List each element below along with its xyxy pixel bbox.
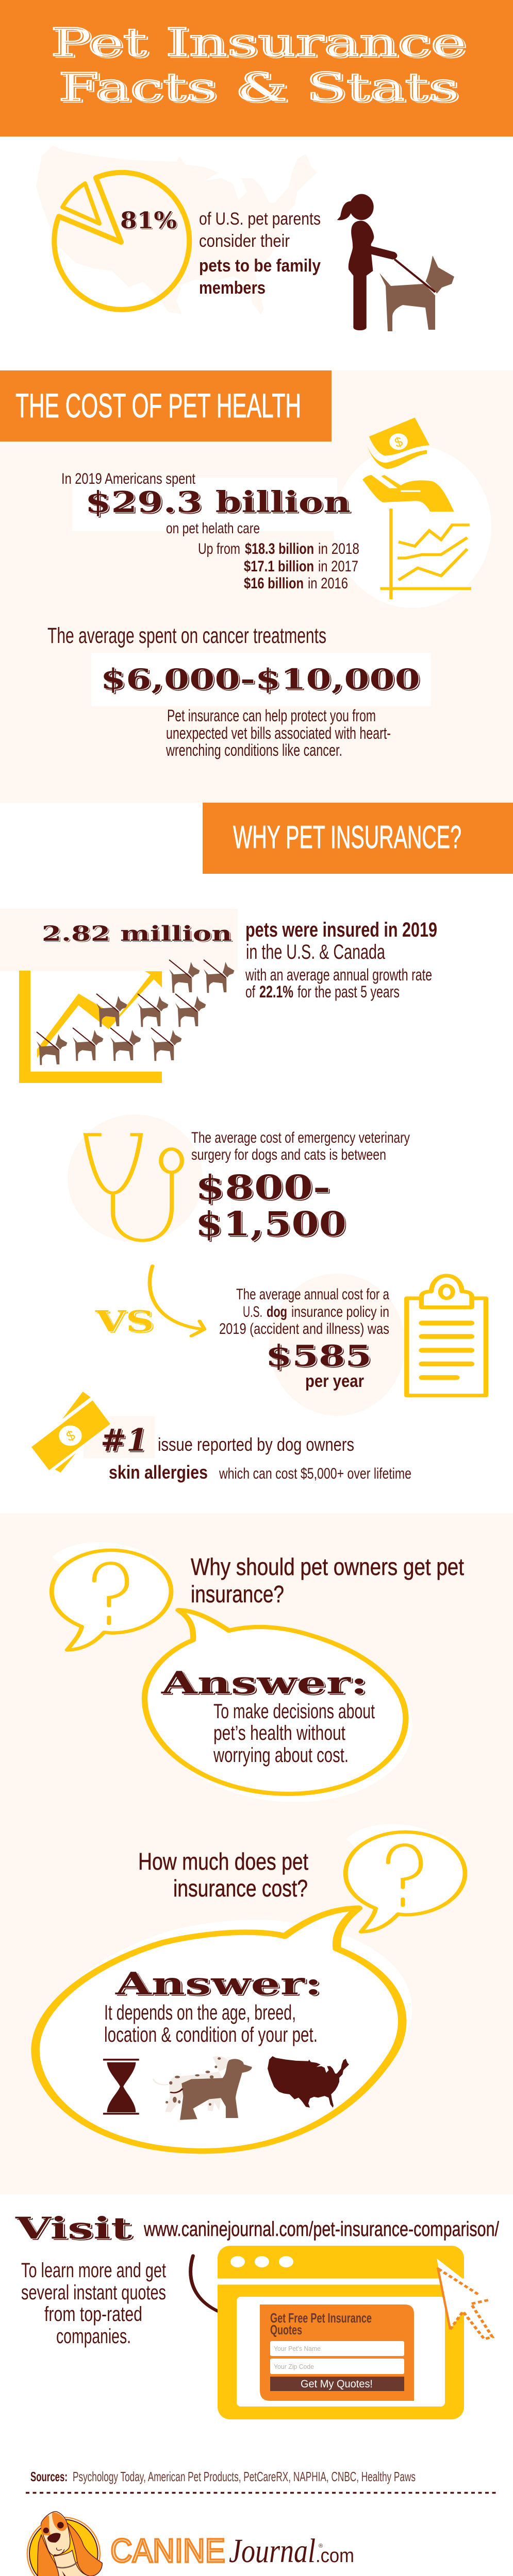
backdrop box: number one bbox=[84, 1416, 155, 1458]
stat: cancer treatment cost: The average spent on cancer treatments bbox=[47, 623, 326, 648]
answer two text: location & condition of your pet. bbox=[104, 2023, 318, 2046]
text: pets insured: of bbox=[245, 982, 255, 1001]
text: prior year spending: in 2018 bbox=[318, 540, 359, 557]
text: pets insured: pets were insured in 2019 bbox=[245, 919, 437, 941]
icon: question bubble two bbox=[345, 1824, 465, 1932]
quote form: Get Free Pet Insurance bbox=[270, 2310, 372, 2326]
icon: cursor bbox=[437, 2259, 492, 2339]
wordmark: .com bbox=[316, 2545, 354, 2567]
quote form: Your Zip Code bbox=[274, 2363, 314, 2370]
stat: spending in 2019 bbox=[61, 470, 351, 537]
stat: annual dog insurance cost: The average annual cost for a bbox=[236, 1286, 389, 1303]
title: Facts & Stats bbox=[58, 64, 458, 110]
text: learn more bbox=[21, 2259, 166, 2348]
heading: the cost of pet health bbox=[0, 370, 332, 442]
text: prior year spending: in 2016 bbox=[308, 575, 348, 592]
text: learn more: companies. bbox=[56, 2325, 131, 2348]
stat: number one issue skin allergies: skin allergies bbox=[109, 1462, 208, 1483]
quote form: Your Pet's Name bbox=[274, 2345, 321, 2352]
stat: spending in 2019: on pet helath care bbox=[166, 520, 260, 537]
text: learn more: To learn more and get bbox=[21, 2259, 166, 2282]
answer one text bbox=[161, 1665, 375, 1767]
icon: pie chart 81 percent bbox=[54, 173, 189, 310]
arrow: vs curve bbox=[150, 1266, 205, 1336]
text: protect from vet bills: Pet insurance can help protect you from bbox=[167, 706, 376, 725]
text: prior year spending: Up from bbox=[198, 540, 240, 557]
text: pets insured: in the U.S. & Canada bbox=[246, 941, 386, 963]
icon: dollar bill bbox=[31, 1392, 110, 1472]
stat: number one issue skin allergies: #1 bbox=[101, 1422, 148, 1459]
dollar sign on bill: $ bbox=[392, 433, 405, 451]
stat: spending in 2019: In 2019 Americans spent bbox=[61, 470, 196, 487]
panel: visit call to action bbox=[14, 2211, 500, 2576]
US map background bbox=[36, 145, 317, 315]
answer bubble two bbox=[36, 1908, 412, 2151]
answer two text bbox=[104, 1966, 322, 2046]
text: pets insured: for the past 5 years bbox=[297, 982, 400, 1001]
stat: number one issue skin allergies: issue reported by dog owners bbox=[158, 1434, 354, 1455]
text: prior year spending: $18.3 billion bbox=[245, 540, 314, 557]
stat: cancer treatment cost bbox=[47, 623, 431, 706]
question one: insurance? bbox=[191, 1581, 284, 1607]
sources: Sources: bbox=[30, 2469, 68, 2484]
icon: US map bbox=[268, 2056, 349, 2108]
text: learn more: from top-rated bbox=[44, 2303, 142, 2326]
text: pets insured: 22.1% bbox=[259, 982, 293, 1001]
stat: annual dog insurance cost: $585 bbox=[266, 1339, 372, 1373]
stat: cancer treatment cost: $6,000-$10,000 bbox=[101, 663, 420, 696]
81 percent figure: 81% bbox=[120, 208, 177, 234]
browser window bbox=[218, 2246, 464, 2419]
question two bbox=[138, 1848, 308, 1902]
answer bubble one bbox=[144, 1610, 412, 1802]
text: protect from vet bills: unexpected vet bills associated with heart- bbox=[166, 724, 391, 742]
stat box: 2.82 million bbox=[0, 909, 238, 971]
chart: growth axes and arrow bbox=[19, 971, 162, 1083]
text: pets insured bbox=[245, 919, 437, 1001]
text: learn more: several instant quotes bbox=[21, 2281, 166, 2304]
logo: canine journal bbox=[27, 2512, 354, 2576]
answer one text: pet’s health without bbox=[213, 1722, 345, 1744]
text: pets insured: with an average annual growth rate bbox=[245, 965, 432, 984]
stat: annual dog insurance cost: insurance policy in bbox=[291, 1303, 389, 1320]
title bbox=[51, 20, 466, 110]
answer one text: Answer: bbox=[161, 1665, 368, 1701]
white circle and box backdrop bbox=[72, 445, 491, 608]
icon: stethoscope bbox=[86, 1134, 182, 1241]
family members text bbox=[199, 209, 321, 298]
icon: dollar bill: $ bbox=[64, 1427, 77, 1445]
arrow: to form bbox=[191, 2256, 245, 2326]
quote form: Quotes bbox=[270, 2322, 302, 2337]
icon: money over hand bbox=[362, 418, 454, 512]
text: protect from vet bills bbox=[166, 706, 391, 759]
question one: Why should pet owners get pet bbox=[191, 1553, 464, 1580]
wordmark: ® bbox=[319, 2543, 323, 2549]
question two: insurance cost? bbox=[173, 1875, 308, 1902]
vs label: VS bbox=[95, 1304, 154, 1338]
question two: How much does pet bbox=[138, 1848, 308, 1875]
quote form bbox=[260, 2304, 414, 2401]
answer two text: Answer: bbox=[115, 1966, 322, 2002]
panel: cost of pet health bbox=[0, 370, 513, 803]
icon: woman walking dog bbox=[337, 194, 454, 331]
panel: why pet insurance bbox=[0, 803, 513, 1483]
panel: questions and answers bbox=[0, 1514, 513, 2194]
stat: annual dog insurance cost: 2019 (accident and illness) was bbox=[219, 1320, 389, 1337]
family members text: of U.S. pet parents bbox=[199, 209, 321, 229]
stat: emergency surgery cost: surgery for dogs and cats is between bbox=[191, 1146, 386, 1163]
stat: annual dog insurance cost: U.S. bbox=[243, 1303, 262, 1320]
stat: emergency surgery cost: $1,500 bbox=[195, 1205, 346, 1244]
visit heading: Visit bbox=[14, 2211, 132, 2246]
quote form: Get My Quotes! bbox=[301, 2378, 373, 2390]
family members text: members bbox=[199, 278, 266, 298]
wordmark bbox=[110, 2532, 354, 2570]
answer one text: worrying about cost. bbox=[213, 1744, 349, 1767]
title banner bbox=[0, 0, 513, 137]
stat: number one issue skin allergies bbox=[101, 1422, 411, 1483]
heading: the cost of pet health: THE COST OF PET HEALTH bbox=[15, 386, 301, 425]
question one bbox=[191, 1553, 464, 1607]
stat: emergency surgery cost bbox=[191, 1129, 410, 1244]
icon: two dogs bbox=[153, 2056, 252, 2120]
icon: pictogram of insured dogs bbox=[37, 960, 234, 1065]
backdrop: stethoscope circle bbox=[68, 1114, 203, 1242]
stat: annual dog insurance cost: per year bbox=[305, 1371, 364, 1391]
stat: annual dog insurance cost: dog bbox=[267, 1303, 287, 1320]
stat: number one issue skin allergies: which can cost $5,000+ over lifetime bbox=[219, 1465, 411, 1482]
stat: emergency surgery cost: The average cost of emergency veterinary bbox=[191, 1129, 410, 1146]
stat: spending in 2019: $29.3 billion bbox=[85, 485, 351, 519]
family members text: pets to be family bbox=[199, 256, 321, 276]
stat: annual dog insurance cost bbox=[219, 1286, 389, 1391]
text: prior year spending: in 2017 bbox=[318, 558, 358, 575]
icon: basset hound bbox=[27, 2512, 102, 2576]
text: prior year spending bbox=[198, 540, 359, 592]
wordmark: CANINE bbox=[110, 2532, 225, 2569]
text: prior year spending: $17.1 billion bbox=[244, 558, 314, 575]
family members text: consider their bbox=[199, 231, 290, 251]
text: protect from vet bills: wrenching conditions like cancer. bbox=[166, 741, 342, 759]
stat box: 2.82 million: 2.82 million bbox=[42, 922, 232, 946]
panel: family members stat bbox=[36, 145, 454, 331]
text: prior year spending: $16 billion bbox=[244, 575, 304, 592]
backdrop: insurance circle bbox=[269, 1274, 405, 1416]
icon: clipboard bbox=[407, 1276, 486, 1396]
heading: why pet insurance bbox=[203, 803, 513, 874]
wordmark: Journal bbox=[229, 2532, 316, 2570]
icon: question bubble one bbox=[52, 1542, 171, 1650]
icon: line chart bbox=[380, 509, 471, 599]
answer one text: To make decisions about bbox=[213, 1700, 375, 1723]
icon: hourglass bbox=[103, 2059, 139, 2115]
title: Pet Insurance bbox=[51, 20, 466, 65]
stat: emergency surgery cost: $800- bbox=[195, 1168, 330, 1207]
answer two text: It depends on the age, breed, bbox=[104, 2001, 296, 2024]
